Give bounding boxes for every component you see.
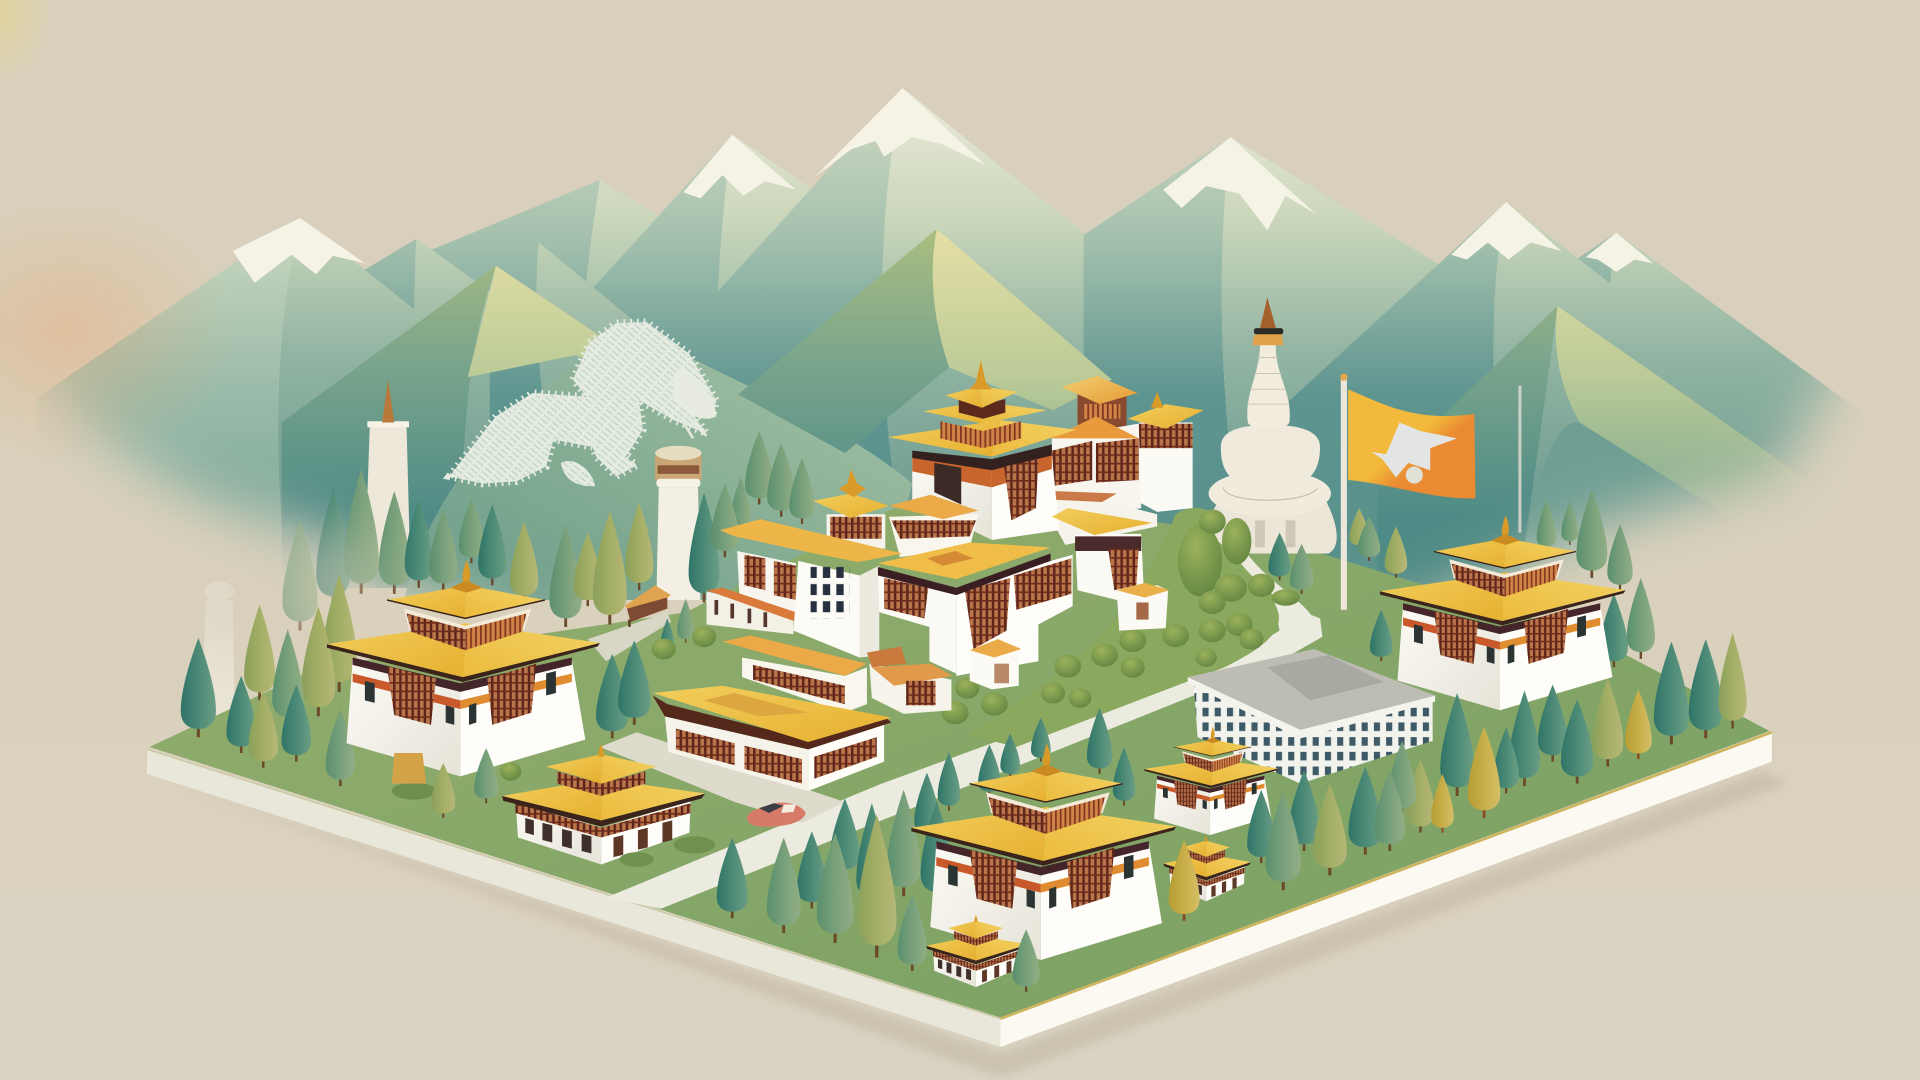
- right wing wall: [1051, 416, 1141, 520]
- foreground trees: [1013, 840, 1200, 992]
- platform right side: [1000, 732, 1772, 1047]
- platform left side: [147, 749, 1000, 1047]
- right keep tower: [1128, 392, 1204, 512]
- main keep body: [912, 444, 1059, 540]
- right back trees: [1349, 490, 1655, 667]
- tower: left: [365, 380, 410, 563]
- government building: [1188, 649, 1435, 784]
- small pagoda, mid: [1144, 727, 1278, 835]
- car: [747, 803, 806, 827]
- green hill beneath dzong: [967, 508, 1279, 747]
- left haze: [147, 514, 380, 661]
- upper small tower: [1062, 376, 1138, 437]
- front peak left: [282, 266, 599, 588]
- front peak centre: [738, 229, 1112, 453]
- small gold hut: [1163, 835, 1251, 901]
- flag pole: [1340, 373, 1348, 610]
- bushes and shrubs: [500, 509, 1314, 781]
- flag and poles: [1340, 373, 1521, 610]
- right lower tower: [1052, 508, 1169, 631]
- low shrubs: [392, 748, 715, 867]
- small central tower: [813, 469, 978, 557]
- white path strip through platform: [606, 600, 1322, 909]
- left wing: [707, 551, 796, 634]
- small lodge, front centre: [926, 915, 1028, 987]
- front forest left: [181, 574, 650, 786]
- right forest: [1247, 633, 1747, 890]
- diorama platform: [147, 490, 1772, 1047]
- grass top: [149, 490, 1769, 1018]
- lower right wall: [1052, 487, 1157, 545]
- dragon relief: [449, 322, 716, 486]
- second thin pole: [1518, 386, 1521, 533]
- lower central block: [878, 542, 1073, 676]
- small lodge, front left: [502, 744, 705, 864]
- main keep tiered roofs: [888, 360, 1076, 457]
- base shadow: [171, 771, 1788, 1078]
- small hut in forest: [624, 585, 671, 627]
- long building: [653, 686, 891, 791]
- pagoda: right: [1380, 515, 1626, 710]
- white tower with window grid: [793, 561, 879, 658]
- tower: middle with painted band: [655, 446, 702, 600]
- lower front block: [722, 636, 1021, 714]
- pagoda: big left: [327, 560, 600, 776]
- central dzong fortress: [707, 360, 1204, 714]
- stupa: [1209, 298, 1337, 553]
- white towers: [202, 380, 702, 722]
- mountain range: [37, 88, 1867, 600]
- left gold roof: [720, 519, 902, 562]
- tower: faded left: [202, 582, 235, 722]
- left mountain: [37, 255, 414, 563]
- hill behind dragon: [405, 359, 912, 600]
- back forest left: [282, 431, 815, 655]
- snow caps: [233, 88, 1653, 283]
- pagoda: front centre: [911, 743, 1176, 960]
- flag of Bhutan: [1348, 389, 1476, 498]
- front peak right: [1378, 306, 1824, 588]
- front forest centre: [717, 708, 1135, 971]
- winding path up the hill: [1234, 545, 1313, 627]
- far mountains: [355, 88, 1867, 588]
- side road: [600, 732, 845, 823]
- warm blush on the left: [0, 196, 239, 465]
